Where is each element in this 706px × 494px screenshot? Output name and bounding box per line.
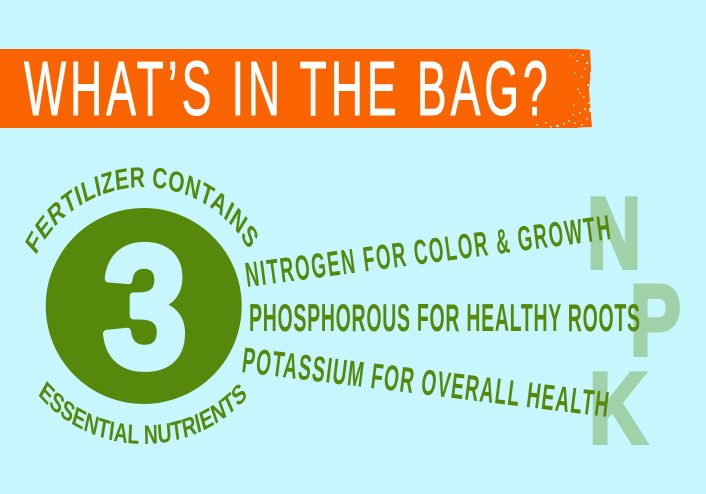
NPK background letters — [587, 178, 681, 465]
NPK background letters: N — [587, 178, 641, 290]
green circle with number 3: 3 — [103, 211, 187, 403]
nutrient line: potassium: POTASSIUM FOR OVERALL HEALTH — [240, 341, 611, 426]
nutrient line: nitrogen: NITROGEN FOR COLOR & GROWTH — [243, 208, 613, 294]
NPK background letters: P — [630, 265, 681, 377]
NPK background letters: K — [589, 353, 647, 465]
title: WHAT’S IN THE BAG? — [24, 46, 548, 132]
curved caption: essential nutrients: ESSENTIAL NUTRIENTS — [38, 381, 246, 444]
nutrient line: phosphorous: PHOSPHOROUS FOR HEALTHY ROOTS — [249, 296, 640, 340]
green circle with number 3 — [46, 208, 242, 404]
header banner — [0, 46, 592, 132]
curved heading: fertilizer contains: FERTILIZER CONTAINS — [25, 167, 258, 254]
